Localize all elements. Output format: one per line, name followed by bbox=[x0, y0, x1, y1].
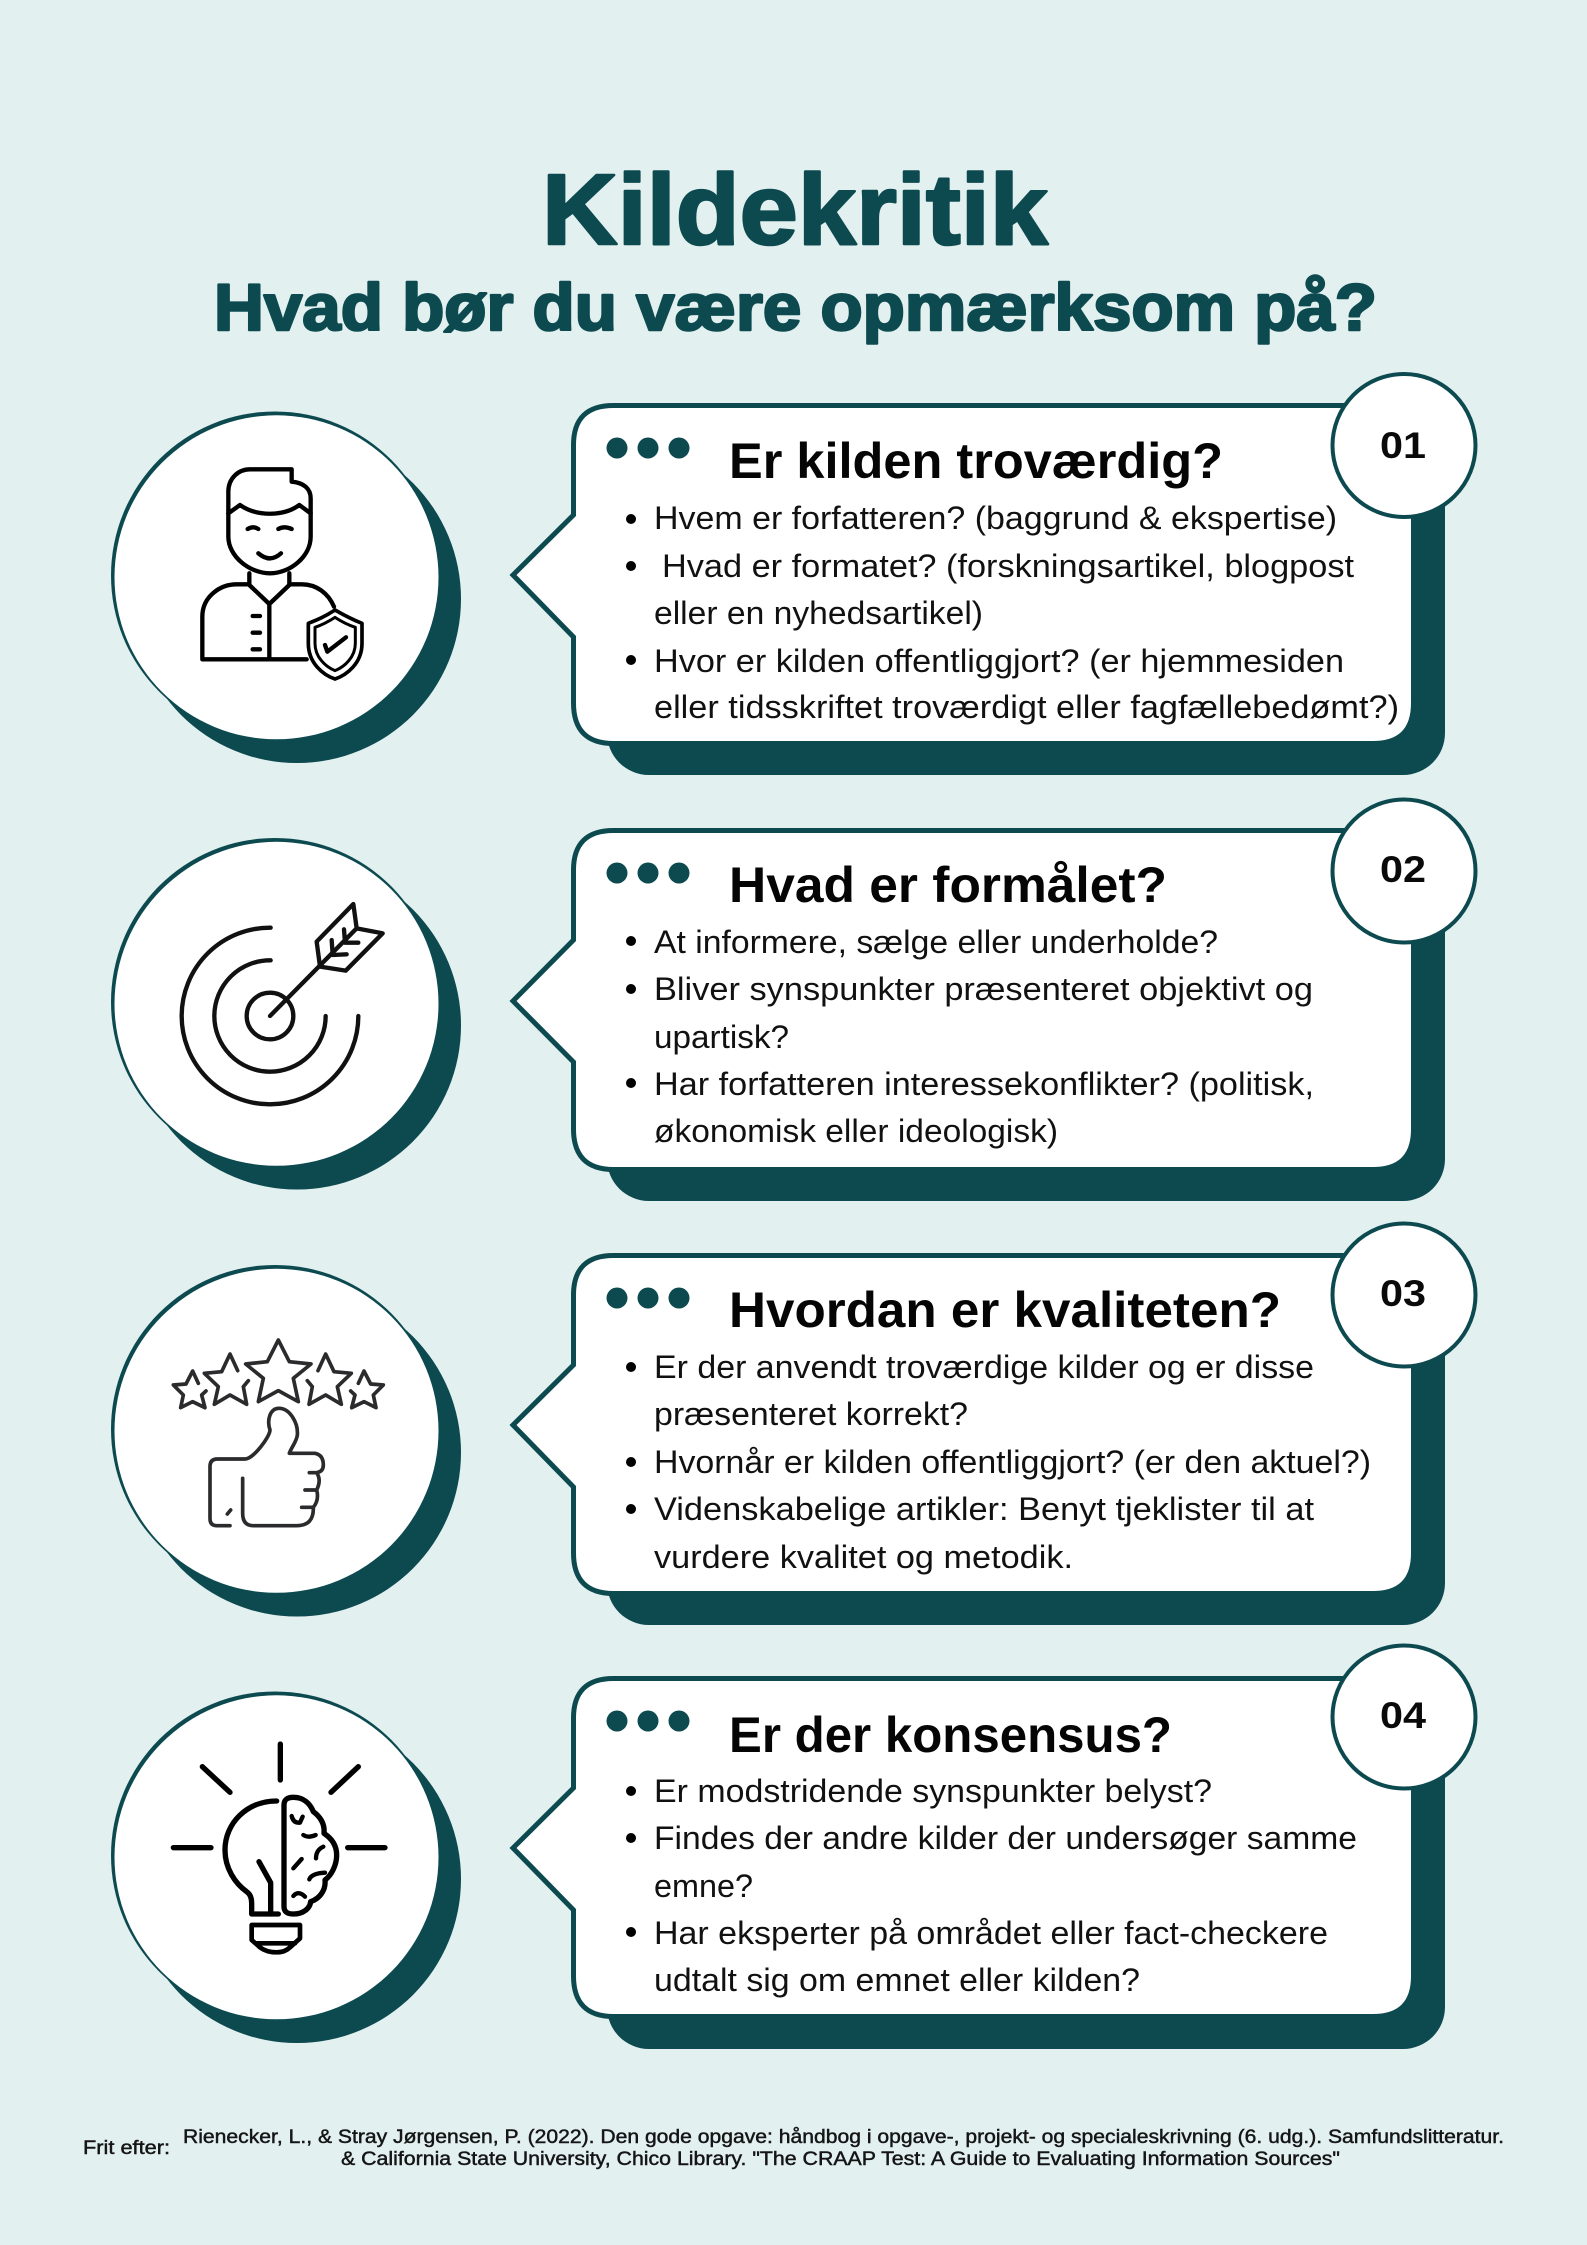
subtitle: Hvad bør du være opmærksom på? bbox=[214, 270, 1377, 344]
number badge 03 bbox=[1332, 1224, 1476, 1366]
bullet list: Hvornår er kilden offentliggjort? (er den aktuel?) bbox=[654, 1444, 1371, 1480]
panel: icon circle 3 bbox=[111, 1265, 461, 1616]
panel: card 3 bbox=[513, 1224, 1476, 1625]
bullet list bbox=[626, 500, 1399, 725]
number badge 01: 01 bbox=[1380, 425, 1426, 466]
dots bbox=[606, 438, 690, 458]
bullet list: vurdere kvalitet og metodik. bbox=[654, 1539, 1073, 1575]
icon: person with shield bbox=[202, 469, 362, 679]
panel: icon circle 1 bbox=[111, 412, 461, 763]
title: Kildekritik bbox=[542, 154, 1048, 266]
panel: card 2 bbox=[513, 800, 1476, 1201]
icon: five stars and thumb up bbox=[173, 1340, 383, 1526]
number badge 02: 02 bbox=[1380, 849, 1426, 890]
bullet list: Hvad er formatet? (forskningsartikel, blogpost bbox=[662, 548, 1354, 584]
panel: card 4 bbox=[513, 1646, 1476, 2049]
panel: card 1 bbox=[513, 374, 1476, 775]
bullet list: Har forfatteren interessekonflikter? (politisk, bbox=[654, 1066, 1314, 1102]
heading: Er der konsensus? bbox=[729, 1707, 1172, 1763]
panel: icon circle 2 bbox=[111, 838, 461, 1190]
number badge 04: 04 bbox=[1380, 1695, 1426, 1736]
bullet list: Videnskabelige artikler: Benyt tjeklister til at bbox=[654, 1491, 1314, 1527]
bullet list: Findes der andre kilder der undersøger samme bbox=[654, 1820, 1357, 1856]
dots bbox=[606, 1288, 690, 1308]
bullet list: eller en nyhedsartikel) bbox=[654, 595, 983, 631]
bullet list: Hvem er forfatteren? (baggrund & ekspertise) bbox=[654, 500, 1337, 536]
number badge 04 bbox=[1332, 1646, 1476, 1788]
bullet list bbox=[626, 1349, 1371, 1575]
footer: sources: & California State University, Chico Library. "The CRAAP Test: A Guide to Evaluating Information Sources" bbox=[341, 2149, 1340, 2170]
bullet list: At informere, sælge eller underholde? bbox=[654, 924, 1218, 960]
bullet list: Bliver synspunkter præsenteret objektivt og bbox=[654, 971, 1313, 1007]
bullet list: emne? bbox=[654, 1868, 753, 1904]
bullet list: Er der anvendt troværdige kilder og er disse bbox=[654, 1349, 1314, 1385]
heading: Hvordan er kvaliteten? bbox=[729, 1282, 1281, 1338]
number badge 01 bbox=[1332, 374, 1476, 517]
dots bbox=[606, 1710, 690, 1732]
bullet list: Er modstridende synspunkter belyst? bbox=[654, 1773, 1212, 1809]
bullet list bbox=[626, 924, 1314, 1149]
bullet list: upartisk? bbox=[654, 1019, 789, 1055]
panel: icon circle 4 bbox=[111, 1692, 461, 2043]
number badge 03: 03 bbox=[1380, 1273, 1426, 1314]
footer: sources: Rienecker, L., & Stray Jørgensen, P. (2022). Den gode opgave: håndbog i opgave-, projekt- og specialeskrivning (6. udg.). Samfundslitteratur. bbox=[183, 2127, 1504, 2148]
bullet list: præsenteret korrekt? bbox=[654, 1396, 968, 1432]
bullet list: Hvor er kilden offentliggjort? (er hjemmesiden bbox=[654, 643, 1344, 679]
footer: sources: Frit efter: bbox=[83, 2138, 170, 2159]
bullet list: eller tidsskriftet troværdigt eller fagfællebedømt?) bbox=[654, 689, 1399, 725]
number badge 02 bbox=[1332, 800, 1476, 942]
bullet list: økonomisk eller ideologisk) bbox=[654, 1113, 1058, 1149]
bullet list: udtalt sig om emnet eller kilden? bbox=[654, 1962, 1140, 1998]
heading: Er kilden troværdig? bbox=[729, 433, 1223, 489]
bullet list: Har eksperter på området eller fact-checkere bbox=[654, 1915, 1328, 1951]
footer: sources bbox=[83, 2127, 1504, 2170]
icon: light bulb with brain bbox=[173, 1744, 385, 1952]
icon: target with arrow bbox=[182, 904, 383, 1104]
bullet list bbox=[626, 1773, 1357, 1998]
heading: Hvad er formålet? bbox=[729, 857, 1167, 913]
dots bbox=[606, 862, 690, 884]
